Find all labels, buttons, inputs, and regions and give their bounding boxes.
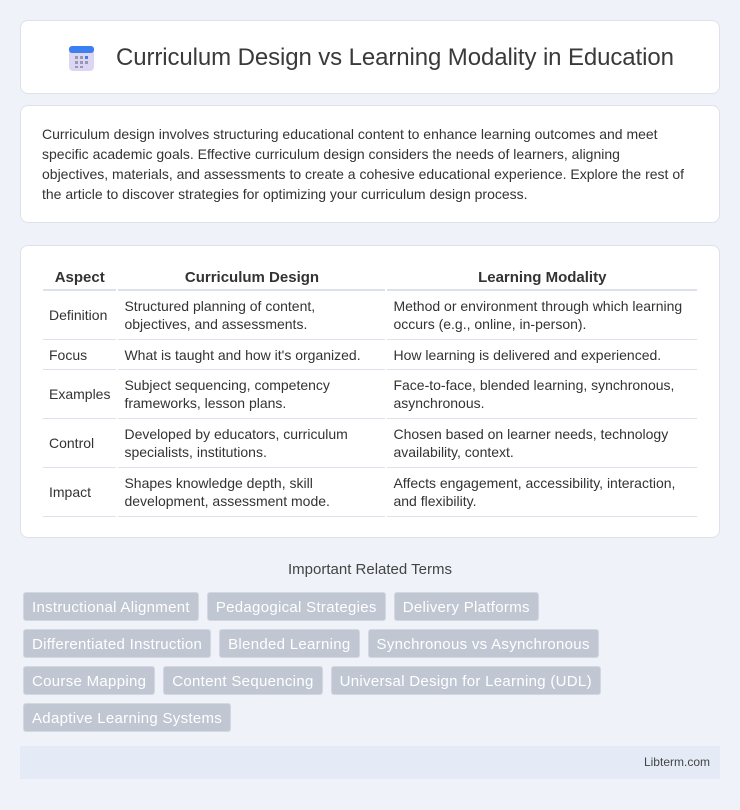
- intro text card: [20, 105, 720, 223]
- footer: [20, 746, 720, 779]
- comparison table card: What is taught and how it's organized.: [124, 346, 361, 362]
- related terms tags: Instructional Alignment: [32, 599, 190, 616]
- comparison table card: Developed by educators, curriculum specialists, institutions.: [124, 426, 348, 460]
- related terms heading: Important Related Terms: [288, 561, 452, 578]
- related terms tags: Delivery Platforms: [403, 599, 530, 616]
- comparison table card: Control: [49, 435, 94, 451]
- related terms tags: [23, 592, 601, 732]
- intro text card: the article to discover strategies for optimizing your curriculum design process.: [42, 186, 528, 202]
- related terms tags: Blended Learning: [228, 636, 351, 653]
- comparison table card: Definition: [49, 307, 107, 323]
- comparison table card: Learning Modality: [478, 268, 606, 286]
- intro text card: Curriculum design involves structuring educational content to enhance learning outcomes and meet: [42, 126, 658, 142]
- comparison table card: Face-to-face, blended learning, synchronous, asynchronous.: [393, 377, 674, 411]
- comparison table card: Structured planning of content, objectives, and assessments.: [124, 298, 315, 332]
- comparison table card: Affects engagement, accessibility, interaction, and flexibility.: [393, 475, 675, 509]
- related terms tags: Differentiated Instruction: [32, 636, 202, 653]
- related terms tags: Universal Design for Learning (UDL): [340, 673, 592, 690]
- intro text card: specific academic goals. Effective curriculum design considers the needs of learners, aligning: [42, 146, 620, 162]
- comparison table card: Aspect: [55, 268, 105, 286]
- related terms tags: Course Mapping: [32, 673, 146, 690]
- comparison table card: Focus: [49, 346, 87, 362]
- related terms tags: Content Sequencing: [172, 673, 314, 690]
- related terms tags: Adaptive Learning Systems: [32, 710, 222, 727]
- title: Curriculum Design vs Learning Modality in Education: [116, 44, 674, 71]
- comparison table card: Chosen based on learner needs, technology availability, context.: [393, 426, 668, 460]
- intro text card: objectives, materials, and assessments to create a cohesive educational experience. Explore the rest of: [42, 166, 684, 182]
- comparison table card: Shapes knowledge depth, skill development, assessment mode.: [124, 475, 330, 509]
- comparison table card: Subject sequencing, competency frameworks, lesson plans.: [124, 377, 330, 411]
- header card: [20, 20, 720, 94]
- comparison table card: Curriculum Design: [185, 268, 319, 286]
- comparison table card: How learning is delivered and experienced.: [393, 346, 661, 362]
- related terms tags: Pedagogical Strategies: [216, 599, 377, 616]
- comparison table card: [20, 245, 720, 538]
- comparison table card: Examples: [49, 386, 110, 402]
- footer: Libterm.com: [644, 755, 710, 769]
- comparison table card: Method or environment through which learning occurs (e.g., online, in-person).: [393, 298, 682, 332]
- comparison table card: Impact: [49, 484, 91, 500]
- icon: calendar: [69, 46, 94, 71]
- related terms tags: Synchronous vs Asynchronous: [377, 636, 590, 653]
